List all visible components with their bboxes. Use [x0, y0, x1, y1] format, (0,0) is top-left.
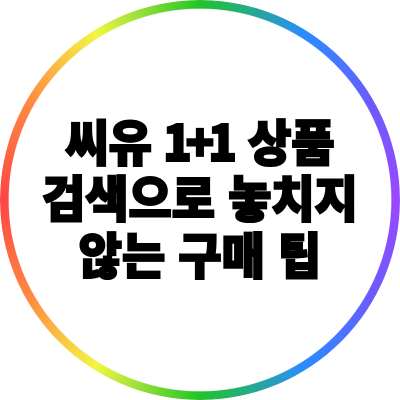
title line 3: 않는 구매 팁	[79, 216, 321, 289]
title line 2: 검색으로 놓치지	[42, 159, 358, 232]
title line 1: 씨유 1+1 상품	[65, 103, 335, 176]
